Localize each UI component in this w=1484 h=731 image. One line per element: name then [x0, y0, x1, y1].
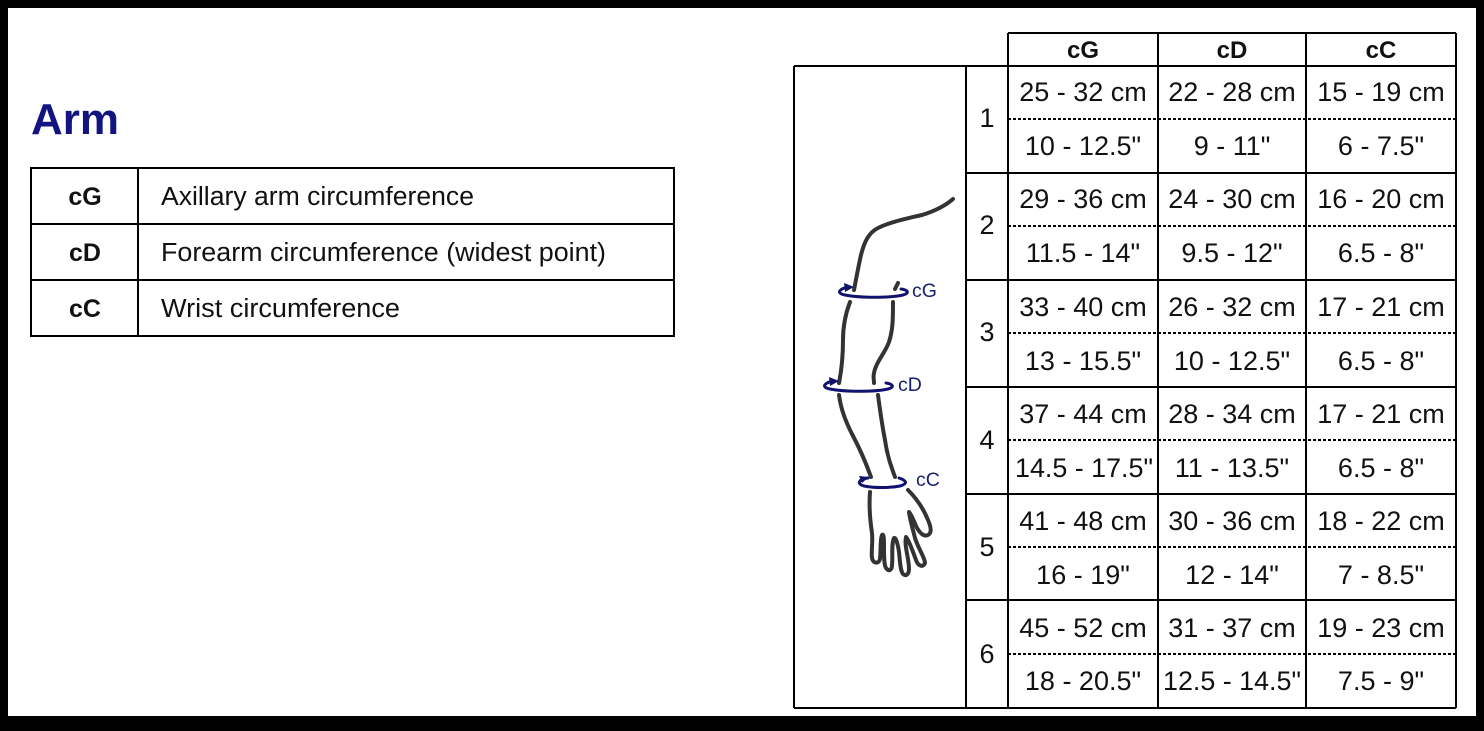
size 6 row: 12.5 - 14.5" [1163, 666, 1301, 696]
size 4 row [979, 399, 1445, 483]
size 5 row: 16 - 19" [1036, 560, 1130, 590]
size 3 row: 3 [979, 317, 995, 347]
size 2 row: 9.5 - 12" [1181, 238, 1283, 268]
size 3 row: 26 - 32 cm [1168, 292, 1296, 322]
panel: size chart table [794, 33, 1456, 708]
size 3 row: 6.5 - 8" [1338, 346, 1424, 376]
size 4 row: 11 - 13.5" [1175, 453, 1289, 483]
size 1 row: 1 [979, 103, 995, 133]
size 4 row: 14.5 - 17.5" [1015, 453, 1153, 483]
size 3 row [979, 292, 1445, 376]
size 4 row: 4 [979, 425, 995, 455]
size 2 row: 2 [979, 210, 995, 240]
size 6 row: 7.5 - 9" [1338, 666, 1424, 696]
size 5 row: 30 - 36 cm [1168, 506, 1296, 536]
size 1 row [979, 77, 1445, 161]
size 2 row: 29 - 36 cm [1019, 184, 1147, 214]
key row: cD: Forearm circumference (widest point) [161, 239, 606, 267]
column headers [1067, 37, 1396, 64]
size 3 row: 17 - 21 cm [1317, 292, 1445, 322]
size 5 row: 18 - 22 cm [1317, 506, 1445, 536]
size 4 row: 17 - 21 cm [1317, 399, 1445, 429]
key row: cG: Axillary arm circumference [161, 183, 474, 211]
size 4 row: 28 - 34 cm [1168, 399, 1296, 429]
size 1 row: 6 - 7.5" [1338, 131, 1424, 161]
size 2 row: 11.5 - 14" [1026, 238, 1140, 268]
size 3 row: 13 - 15.5" [1025, 346, 1141, 376]
size 1 row: 15 - 19 cm [1317, 77, 1445, 107]
column headers: cG [1067, 37, 1099, 64]
size 2 row [979, 184, 1445, 268]
size 1 row: 22 - 28 cm [1168, 77, 1296, 107]
key row: cG: cG [68, 183, 102, 211]
size 5 row: 12 - 14" [1185, 560, 1279, 590]
size 3 row: 10 - 12.5" [1174, 346, 1290, 376]
measurement ring: cG [840, 280, 937, 302]
panel: measurement key table [31, 168, 674, 336]
size 5 row [979, 506, 1445, 590]
size 1 row: 9 - 11" [1194, 131, 1270, 161]
size 6 row: 31 - 37 cm [1168, 613, 1296, 643]
size 1 row: 10 - 12.5" [1025, 131, 1141, 161]
size 6 row [979, 613, 1445, 696]
measurement ring: cG: cG [912, 280, 937, 302]
column headers: cD [1217, 37, 1247, 64]
size 6 row: 18 - 20.5" [1025, 666, 1141, 696]
column headers: cC [1366, 37, 1396, 64]
measurement ring: cC: cC [916, 469, 940, 491]
measurement ring: cC [859, 469, 940, 491]
key row: cD: cD [69, 239, 101, 267]
size 4 row: 6.5 - 8" [1338, 453, 1424, 483]
size 3 row: 33 - 40 cm [1019, 292, 1147, 322]
key row: cC: cC [69, 295, 101, 323]
measurement ring: cD: cD [898, 374, 922, 396]
size 4 row: 37 - 44 cm [1019, 399, 1147, 429]
size 5 row: 41 - 48 cm [1019, 506, 1147, 536]
size 6 row: 6 [979, 639, 995, 669]
size 5 row: 5 [979, 532, 995, 562]
arm outline [839, 199, 953, 575]
icon: arm diagram with measurement rings [825, 199, 953, 575]
size 6 row: 19 - 23 cm [1317, 613, 1445, 643]
measurement ring: cD [825, 374, 922, 396]
size 1 row: 25 - 32 cm [1019, 77, 1147, 107]
size 2 row: 16 - 20 cm [1317, 184, 1445, 214]
key row: cC: Wrist circumference [161, 295, 400, 323]
size 2 row: 6.5 - 8" [1338, 238, 1424, 268]
size 5 row: 7 - 8.5" [1338, 560, 1424, 590]
title: Arm [31, 95, 119, 144]
size 6 row: 45 - 52 cm [1019, 613, 1147, 643]
size 2 row: 24 - 30 cm [1168, 184, 1296, 214]
key row: cC [69, 295, 400, 323]
